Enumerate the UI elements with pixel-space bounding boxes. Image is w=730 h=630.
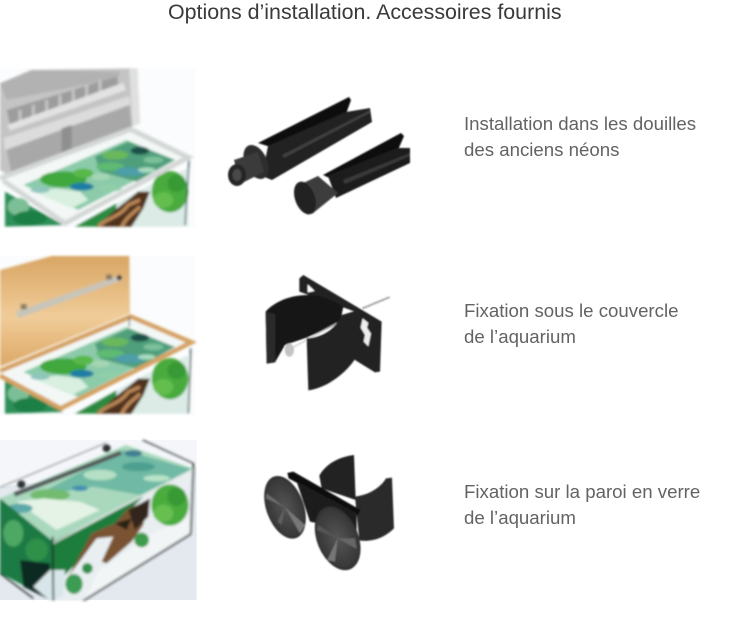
- text: neon sockets: [464, 113, 696, 160]
- text: glass wall: [464, 481, 700, 528]
- icon: wooden lid: [0, 256, 130, 367]
- icon: tube adapters: [228, 97, 410, 217]
- second adapter: [290, 133, 410, 217]
- clip: [287, 455, 394, 541]
- icon: LED lamp on glass: [13, 444, 122, 497]
- text: under lid: [464, 300, 678, 347]
- clip front wall: [307, 311, 357, 390]
- panel: glass aquarium with mounted lamp: [0, 440, 197, 601]
- clip back and left wall: [266, 295, 343, 364]
- left suction cup: [256, 470, 314, 544]
- icon: LED tube: [16, 274, 123, 318]
- panel: aquarium with wooden lid: [0, 256, 195, 415]
- right suction cup: [306, 500, 369, 577]
- glass edges: [0, 440, 193, 601]
- text: under lid: de l’aquarium: [464, 326, 576, 347]
- back plate: [299, 275, 382, 372]
- water surface: [0, 445, 193, 542]
- icon: screw-mounted clip: [266, 275, 390, 390]
- text: glass wall: de l’aquarium: [464, 507, 576, 528]
- text: under lid: Fixation sous le couvercle: [464, 300, 678, 321]
- panel: aquarium with grey hood: [0, 68, 195, 228]
- aquarium tank: [0, 129, 189, 227]
- first adapter: [228, 97, 372, 186]
- front planted pane with driftwood: [0, 468, 193, 601]
- text: neon sockets: Installation dans les douilles: [464, 113, 696, 134]
- aquarium tank: [0, 317, 191, 414]
- text: glass wall: Fixation sur la paroi en verre: [464, 481, 700, 502]
- title: Options d’installation. Accessoires fournis: [168, 0, 562, 24]
- text: neon sockets: des anciens néons: [464, 139, 619, 160]
- icon: suction cup clip: [256, 455, 394, 577]
- icon: grey hood with lamp: [0, 68, 140, 177]
- screw: [285, 297, 390, 357]
